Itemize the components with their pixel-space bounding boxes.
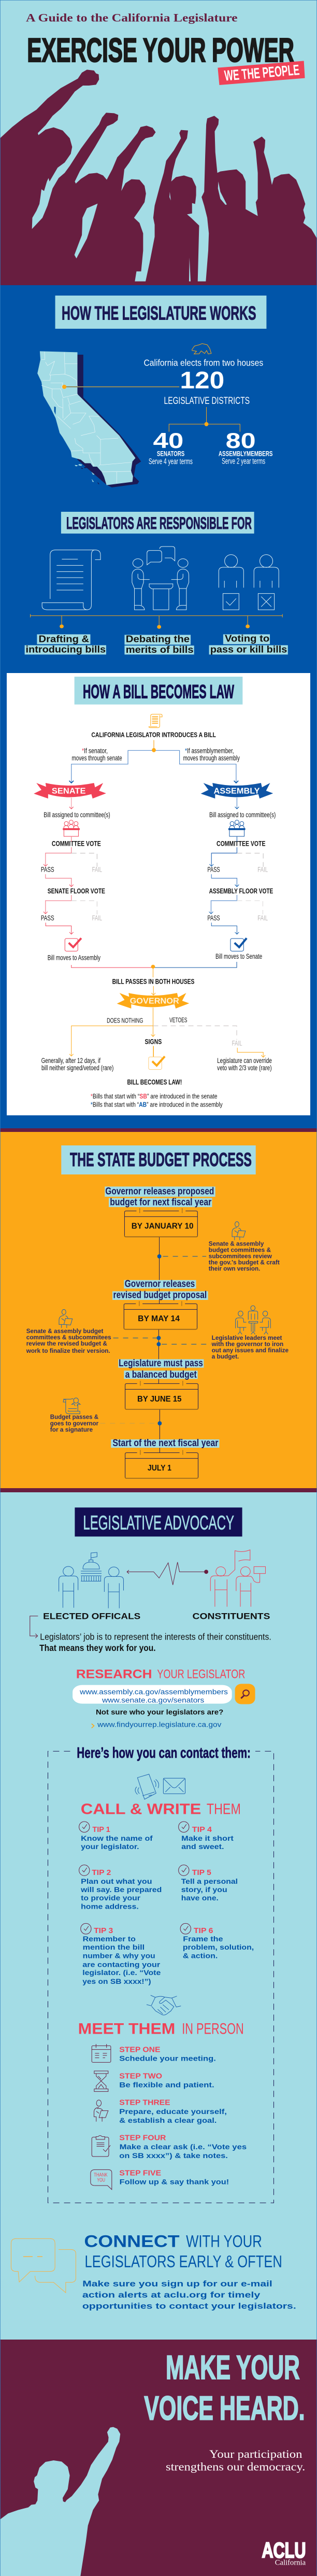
- arrows: assembly committee branches: [209, 836, 263, 867]
- tip 3: [81, 1923, 161, 1986]
- heading: how a bill becomes law: [75, 677, 242, 705]
- search bar: legislator websites: www.senate.ca.gov/senators: [102, 1696, 205, 1704]
- step: governor releases proposed budget: budget for next fiscal year: [110, 1197, 211, 1208]
- arrow: assembly pass to check: [211, 922, 239, 934]
- icon: voting people: [219, 555, 279, 610]
- tip 5: have one.: [181, 1894, 219, 1902]
- text: legislature can override: veto with 2/3 vote (rare): [217, 1064, 272, 1072]
- search bar: legislator websites: www.assembly.ca.gov/assemblymembers: [79, 1688, 228, 1696]
- tip 2: TIP 2: [92, 1869, 111, 1877]
- step: legislature must pass a balanced budget: [118, 1357, 204, 1380]
- text: legislature can override: Legislature can override: [217, 1057, 272, 1065]
- footnote: bill prefixes: *Bills that start with “AB” are introduced in the assembly: [91, 1101, 223, 1109]
- text: fail (senate committee): FAIL: [92, 866, 102, 874]
- heading: call and write them: THEM: [207, 1800, 241, 1817]
- arrow: senate to committee: [69, 797, 74, 809]
- stat: 80 assemblymembers: ASSEMBLYMEMBERS: [219, 450, 273, 458]
- text: legislative leaders meet: Legislative leaders meet: [212, 1335, 282, 1341]
- icon: assembly check box: [230, 938, 247, 951]
- text: revised budget review: committees & subcommitees: [26, 1334, 111, 1341]
- connector: both houses join: [71, 962, 237, 977]
- tip 3: mention the bill: [83, 1943, 145, 1952]
- text: pass (senate floor): PASS: [41, 914, 54, 922]
- arrows: governor options: [69, 1007, 237, 1056]
- stat: 40 senators: 40: [153, 428, 183, 453]
- dashed frame: contact methods: [48, 1751, 273, 2203]
- icon: senate committee: [63, 820, 79, 836]
- step two: STEP TWO: [119, 2073, 162, 2080]
- icon: debating people: [132, 547, 189, 610]
- stat: 80 assemblymembers: Serve 2 year terms: [222, 457, 265, 466]
- step four: [92, 2134, 247, 2160]
- text: revised budget review: review the revised budget &: [26, 1340, 107, 1347]
- tip 2: to provide your: [81, 1894, 140, 1902]
- tip 6: problem, solution,: [183, 1943, 254, 1952]
- text: bill assigned to committee (assembly): Bill assigned to committee(s): [209, 811, 276, 819]
- divider: maroon strip: [0, 1488, 317, 1492]
- tip 6: Frame the: [183, 1935, 223, 1943]
- label: elected officials: ELECTED OFFICALS: [43, 1611, 140, 1621]
- calendar: by june 15: [125, 1381, 198, 1409]
- text: California legislator introduces a bill: CALIFORNIA LEGISLATOR INTRODUCES A BILL: [91, 732, 216, 739]
- heading: connect with your legislators early and often: [84, 2232, 282, 2271]
- icon: legislative leaders meeting: [236, 1306, 270, 1334]
- connector: districts split into two houses: [169, 407, 240, 432]
- calendar: july 1: JULY 1: [148, 1463, 171, 1473]
- step: governor releases revised budget proposal: Governor releases: [125, 1278, 195, 1290]
- tip 3: number & why you: [83, 1952, 155, 1960]
- step one: Schedule your meeting.: [119, 2055, 216, 2063]
- timeline line: may to july: [159, 1329, 160, 1453]
- panel: how the legislature works: [0, 285, 317, 1128]
- text: senate and assembly budget committees review: their own version.: [209, 1266, 260, 1272]
- text: committee vote (senate): COMMITTEE VOTE: [52, 840, 101, 848]
- text: revised budget review: Senate & assembly budget: [26, 1328, 104, 1335]
- connector: committees review dot: [157, 1254, 206, 1258]
- text: your participation strengthens our democracy: [166, 2448, 305, 2473]
- text: if senator: *If senator,: [82, 747, 108, 755]
- label: legislative districts: LEGISLATIVE DISTRICTS: [164, 395, 250, 407]
- heading: research your legislator: YOUR LEGISLATOR: [157, 1667, 245, 1681]
- search bar: legislator websites: [73, 1685, 232, 1704]
- arrow: veto override: [237, 1048, 265, 1057]
- icon: senate check box: [65, 938, 81, 951]
- step one: [92, 2044, 216, 2063]
- tip 3: TIP 3: [94, 1927, 113, 1935]
- arrow: senate pass to check: [46, 922, 74, 934]
- icon: assembly committee: [228, 820, 245, 836]
- text: sign up for action alerts: [82, 2279, 296, 2311]
- tip 6: & action.: [183, 1952, 218, 1960]
- step: governor releases revised budget proposal: revised budget proposal: [113, 1290, 207, 1300]
- logo: ACLU California: California: [275, 2558, 306, 2567]
- subtitle: a guide to the California Legislature: A Guide to the California Legislature: [26, 12, 238, 24]
- timeline: [31, 614, 282, 629]
- arrow: assembly pass to floor vote: [211, 874, 239, 887]
- label: debating the merits of bills: [124, 634, 194, 655]
- heading: meet them in person: [78, 2020, 244, 2037]
- banner: assembly: [201, 783, 273, 799]
- label: constituents: CONSTITUENTS: [193, 1611, 270, 1621]
- text: legislative leaders meet: a budget.: [212, 1353, 239, 1360]
- arrows: senate floor branches: [44, 895, 97, 914]
- footnote: bill prefixes: [91, 1093, 223, 1109]
- arrow: senate pass to floor vote: [46, 874, 74, 887]
- text: bill moves to senate: Bill moves to Senate: [215, 953, 262, 961]
- tip 1: your legislator.: [81, 1843, 139, 1851]
- step: legislature must pass a balanced budget: a balanced budget: [125, 1369, 197, 1380]
- text: generally after 12 days: Generally, after 12 days, if: [41, 1057, 100, 1065]
- text: senate and assembly budget committees review: the gov.'s budget & craft: [209, 1259, 280, 1266]
- icon: person reading: [59, 1309, 73, 1328]
- panel: the state budget process: [0, 1132, 317, 1488]
- text: legislature can override: [217, 1057, 272, 1072]
- text: senate and assembly budget committees review: Senate & assembly: [209, 1241, 264, 1247]
- tip 2: Plan out what you: [81, 1878, 152, 1886]
- tip 6: TIP 6: [194, 1927, 213, 1935]
- banner: senate: SENATE: [52, 787, 85, 795]
- heading: research your legislator: [76, 1667, 245, 1681]
- tip 5: story, if you: [181, 1886, 227, 1894]
- icon: phone and envelope: [135, 1774, 185, 1799]
- arrow: bracket to explanation: [30, 1616, 38, 1638]
- calendar: by may 14: BY MAY 14: [138, 1313, 180, 1323]
- tip 5: Tell a personal: [181, 1878, 238, 1886]
- text: senate and assembly budget committees review: subcommitees review: [209, 1253, 272, 1259]
- icon: speech bubbles: [11, 2238, 76, 2293]
- text: generally after 12 days: bill neither signed/vetoed (rare): [41, 1064, 113, 1072]
- heading: how the legislature works: [55, 296, 266, 329]
- text: legislators job: [39, 1632, 271, 1653]
- step four: on SB xxxx”) & take notes.: [119, 2152, 228, 2160]
- divider: maroon strip: [0, 1128, 317, 1132]
- panel: legislative advocacy: [0, 1492, 317, 2340]
- heading: connect with your legislators early and often: WITH YOUR: [186, 2232, 262, 2251]
- tip 4: Make it short: [181, 1835, 234, 1843]
- link: find your rep: www.findyourrep.legislature.ca.gov: [97, 1721, 222, 1729]
- text: moves through senate: moves through senate: [72, 754, 122, 762]
- text: generally after 12 days: [41, 1057, 113, 1072]
- tip 2: home address.: [81, 1903, 139, 1911]
- tip 1: Know the name of: [81, 1835, 153, 1843]
- text: vetoes: VETOES: [169, 1017, 187, 1024]
- tip 2: will say. Be prepared: [80, 1886, 162, 1894]
- heading: call and write them: CALL & WRITE: [81, 1800, 201, 1817]
- calendar: by june 15: BY JUNE 15: [137, 1394, 182, 1404]
- arrow: assembly to committee: [235, 797, 239, 809]
- text: fail (assembly committee): FAIL: [257, 866, 268, 874]
- step five: THANK: [94, 2172, 108, 2178]
- connector: revised budget review dots: [113, 1336, 211, 1346]
- step five: YOU: [97, 2177, 105, 2183]
- text: fail (veto): FAIL: [232, 1040, 242, 1047]
- stat: 40 senators: SENATORS: [157, 450, 184, 458]
- tip 6: [180, 1923, 254, 1960]
- silhouette: crowd of raised fists: [0, 69, 317, 285]
- text: legislators job: That means they work for you.: [39, 1643, 156, 1653]
- tip 3: are contacting your: [82, 1961, 160, 1969]
- step: governor releases revised budget proposal: [112, 1278, 208, 1300]
- calendar: by may 14: [124, 1301, 197, 1329]
- label: debating the merits of bills: Debating the: [126, 634, 190, 645]
- calendar: july 1: [125, 1450, 198, 1478]
- heading: meet them in person: IN PERSON: [182, 2020, 244, 2037]
- panel: header: [0, 0, 317, 285]
- icon: bill scroll: [149, 714, 162, 727]
- step three: [94, 2099, 227, 2125]
- text: assembly floor vote: ASSEMBLY FLOOR VOTE: [209, 887, 273, 895]
- label: voting to pass or kill bills: Voting to: [225, 634, 269, 644]
- text: budget passes to governor: [50, 1414, 98, 1433]
- heading: legislators are responsible for: [61, 512, 254, 534]
- arrows: assembly floor branches: [209, 895, 263, 914]
- connector: budget passes dot: [100, 1421, 162, 1425]
- text: not sure who your legislators are: Not sure who your legislators are?: [96, 1709, 223, 1716]
- text: bill passes in both houses: BILL PASSES IN BOTH HOUSES: [112, 978, 194, 986]
- calendar: by january 10: [124, 1208, 197, 1237]
- text: your participation strengthens our democracy: strengthens our democracy.: [166, 2460, 305, 2473]
- icon: scroll: [42, 550, 100, 610]
- text: bill moves to assembly: Bill moves to Assembly: [48, 954, 100, 962]
- icon: person reading: [232, 1222, 246, 1240]
- text: bill assigned to committee (senate): Bill assigned to committee(s): [44, 811, 110, 819]
- tip 3: legislator. (i.e. “Vote: [82, 1969, 161, 1977]
- timeline line: january to may: [159, 1237, 160, 1304]
- heading: connect with your legislators early and often: CONNECT: [84, 2232, 180, 2251]
- text: senate and assembly budget committees review: budget committees &: [209, 1247, 271, 1253]
- icon: constituents with flag and sign: [210, 1550, 265, 1607]
- text: California elects from two houses: California elects from two houses: [144, 358, 263, 368]
- label: drafting and introducing bills: [25, 634, 106, 655]
- step five: [91, 2169, 229, 2190]
- tip 1: [79, 1822, 153, 1851]
- heading: make your voice heard: [144, 2349, 305, 2427]
- icon: handshake: [147, 1995, 181, 2015]
- text: your participation strengthens our democracy: Your participation: [209, 2448, 302, 2461]
- banner: senate: [34, 783, 106, 799]
- arrow: to governor: [151, 986, 155, 995]
- heading: research your legislator: RESEARCH: [76, 1667, 152, 1681]
- map: California counties: [37, 351, 141, 487]
- label: voting to pass or kill bills: pass or kill bills: [210, 645, 287, 655]
- text: pass (senate committee): PASS: [41, 866, 54, 874]
- banner: assembly: ASSEMBLY: [214, 787, 260, 795]
- stat: 40 senators: Serve 4 year terms: [149, 457, 193, 466]
- text: if assemblymember: *If assemblymember,: [185, 747, 234, 755]
- tip 1: TIP 1: [92, 1826, 110, 1834]
- calendar: by january 10: BY JANUARY 10: [132, 1221, 194, 1230]
- step five: Follow up & say thank you!: [120, 2178, 229, 2186]
- banner: governor: GOVERNOR: [130, 997, 179, 1005]
- badge: we the people: [218, 61, 305, 85]
- text: revised budget review: work to finalize their version.: [26, 1348, 110, 1354]
- icon: chevron: [92, 1724, 94, 1728]
- step two: [94, 2071, 214, 2092]
- text: pass (assembly committee): PASS: [207, 866, 220, 874]
- tip 4: TIP 4: [192, 1826, 212, 1834]
- text: fail (assembly floor): FAIL: [257, 914, 268, 922]
- label: drafting and introducing bills: Drafting &: [39, 634, 89, 645]
- silhouette: raised fist: [0, 2427, 120, 2576]
- tip 3: Remember to: [83, 1935, 136, 1943]
- step: governor releases proposed budget: [105, 1186, 215, 1208]
- heading: meet them in person: MEET THEM: [78, 2020, 175, 2037]
- label: voting to pass or kill bills: [209, 634, 288, 655]
- label: debating the merits of bills: merits of bills: [126, 645, 194, 655]
- heading: the state budget process: [61, 1145, 256, 1174]
- number: 120: 120: [180, 367, 224, 394]
- text: legislative leaders meet: with the governor to iron: [211, 1341, 283, 1348]
- step: governor releases proposed budget: Governor releases proposed: [105, 1186, 214, 1197]
- panel: make your voice heard: [0, 2340, 317, 2576]
- icon: signed budget scroll: [63, 1398, 80, 1414]
- arrows: senate committee branches: [44, 836, 97, 867]
- step: start of the next fiscal year: Start of the next fiscal year: [112, 1437, 219, 1449]
- text: moves through assembly: moves through assembly: [183, 754, 240, 762]
- icon: California bear: [192, 344, 211, 354]
- step four: STEP FOUR: [119, 2134, 166, 2142]
- text: signs: SIGNS: [145, 1038, 162, 1046]
- text: bill becomes law: BILL BECOMES LAW!: [127, 1079, 182, 1086]
- banner: governor: [117, 993, 189, 1009]
- tip 3: yes on SB xxxx!”): [82, 1978, 151, 1986]
- step five: STEP FIVE: [119, 2169, 161, 2177]
- stat: 40 senators: [149, 428, 193, 466]
- arrow: constituents to elected officials: [127, 1562, 208, 1585]
- tip 2: [79, 1865, 162, 1911]
- step three: Prepare, educate yourself,: [119, 2108, 227, 2116]
- text: budget passes to governor: for a signature: [50, 1426, 93, 1433]
- step one: STEP ONE: [119, 2046, 161, 2054]
- panel: how a bill becomes law: [7, 673, 310, 1115]
- text: sign up for action alerts: Make sure you sign up for our e-mail: [82, 2279, 272, 2288]
- tip 4: and sweet.: [181, 1843, 224, 1851]
- step three: & establish a clear goal.: [119, 2117, 217, 2125]
- logo: ACLU California: [262, 2538, 306, 2567]
- text: sign up for action alerts: opportunities to contact your legislators.: [82, 2301, 296, 2311]
- text: sign up for action alerts: action alerts at aclu.org for timely: [82, 2290, 261, 2300]
- stat: 80 assemblymembers: [219, 428, 273, 466]
- text: senate floor vote: SENATE FLOOR VOTE: [48, 887, 105, 895]
- connector: map to 120 districts: [62, 385, 179, 389]
- step two: Be flexible and patient.: [119, 2081, 214, 2089]
- icon: search button: [235, 1684, 255, 1704]
- text: legislative leaders meet: [211, 1335, 289, 1360]
- arrow: signs to check: [153, 1046, 154, 1057]
- label: drafting and introducing bills: introducing bills: [26, 645, 106, 655]
- step three: STEP THREE: [119, 2099, 170, 2107]
- icon: elected officials and capitol: [59, 1552, 123, 1608]
- text: pass (assembly floor): PASS: [207, 914, 220, 922]
- tip 5: [179, 1865, 238, 1902]
- text: budget passes to governor: Budget passes &: [50, 1414, 98, 1420]
- step four: Make a clear ask (i.e. “Vote yes: [120, 2143, 247, 2151]
- tip 5: TIP 5: [192, 1869, 211, 1877]
- text: legislative leaders meet: out any issues and finalize: [212, 1347, 289, 1354]
- heading: legislative advocacy: [75, 1507, 242, 1536]
- text: does nothing: DOES NOTHING: [107, 1017, 143, 1025]
- step: legislature must pass a balanced budget: Legislature must pass: [119, 1357, 203, 1369]
- icon: signed check box: [149, 1056, 165, 1070]
- text: revised budget review: [26, 1328, 111, 1354]
- stat: 80 assemblymembers: 80: [226, 428, 256, 453]
- text: senate and assembly budget committees review: [209, 1241, 280, 1272]
- text: committee vote (assembly): COMMITTEE VOTE: [217, 840, 265, 848]
- arrows: split to senate and assembly: [69, 740, 238, 783]
- text: budget passes to governor: goes to governor: [50, 1420, 98, 1427]
- footnote: bill prefixes: *Bills that start with “SB” are introduced in the senate: [91, 1093, 218, 1100]
- text: fail (senate floor): FAIL: [92, 914, 102, 922]
- tip 4: [179, 1822, 234, 1851]
